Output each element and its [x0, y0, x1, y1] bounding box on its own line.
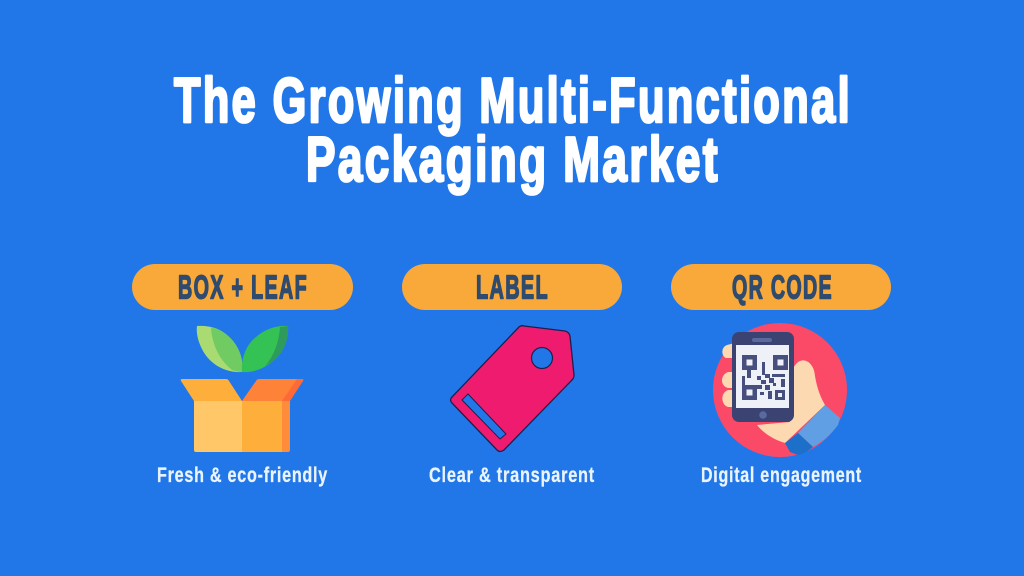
panel: label [402, 264, 622, 487]
title [174, 66, 852, 195]
icon: box with leaves [181, 326, 303, 452]
caption: digital engagement: Digital engagement [701, 463, 862, 487]
caption: clear & transparent: Clear & transparent [429, 463, 595, 487]
pill heading: qr code: QR CODE [732, 268, 833, 306]
pill heading: qr code [671, 264, 891, 310]
pill heading: box + leaf: BOX + LEAF [178, 268, 308, 306]
panel: qr code [671, 264, 891, 487]
icon: tag [450, 326, 574, 452]
icon: phone with qr code in hand [713, 323, 847, 457]
caption: fresh & eco-friendly: Fresh & eco-friendly [157, 463, 328, 487]
title: Packaging Market [306, 125, 720, 195]
pill heading: label: LABEL [476, 268, 549, 306]
pill heading: label [402, 264, 622, 310]
pill heading: box + leaf [132, 264, 353, 310]
panel: box + leaf [132, 264, 353, 487]
